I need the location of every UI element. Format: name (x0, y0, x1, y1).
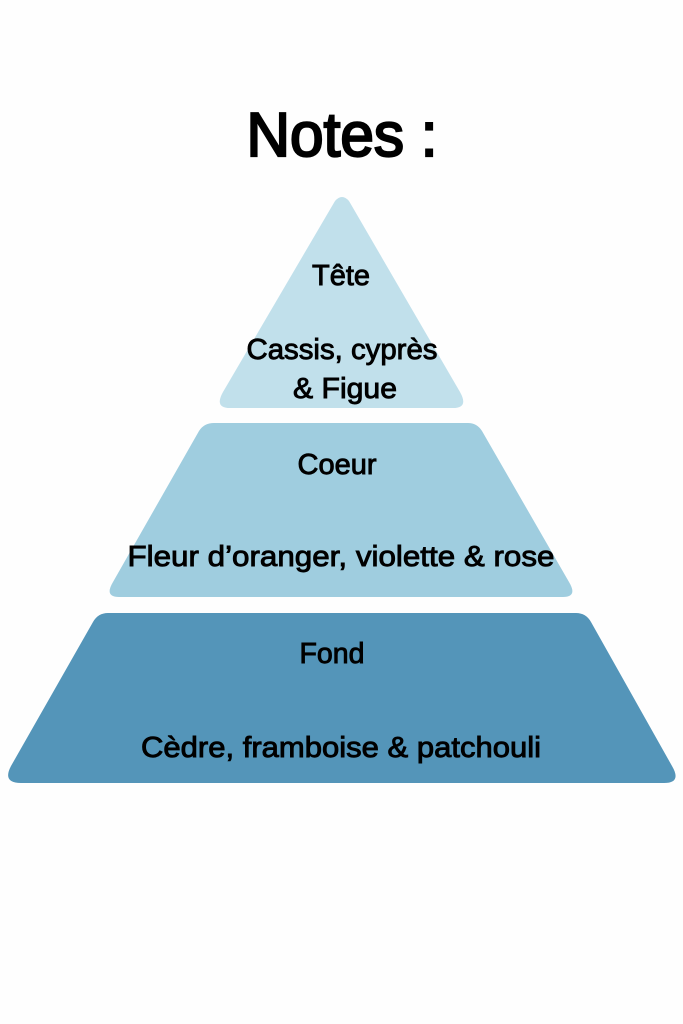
panel: tête (top tier) (220, 197, 463, 408)
text: coeur notes: Fleur d’oranger, violette & rose (128, 541, 554, 573)
heading: tête: Tête (312, 260, 370, 292)
heading: fond: Fond (300, 638, 364, 670)
text: tête notes: Cassis, cyprès (246, 334, 438, 366)
text: tête notes line 2: & Figue (293, 373, 397, 405)
text: fond notes: Cèdre, framboise & patchouli (141, 732, 541, 764)
title: Notes : (246, 101, 438, 170)
panel: fond (bottom tier) (8, 613, 676, 783)
heading: coeur: Coeur (298, 449, 377, 481)
panel: coeur (middle tier) (110, 423, 572, 597)
